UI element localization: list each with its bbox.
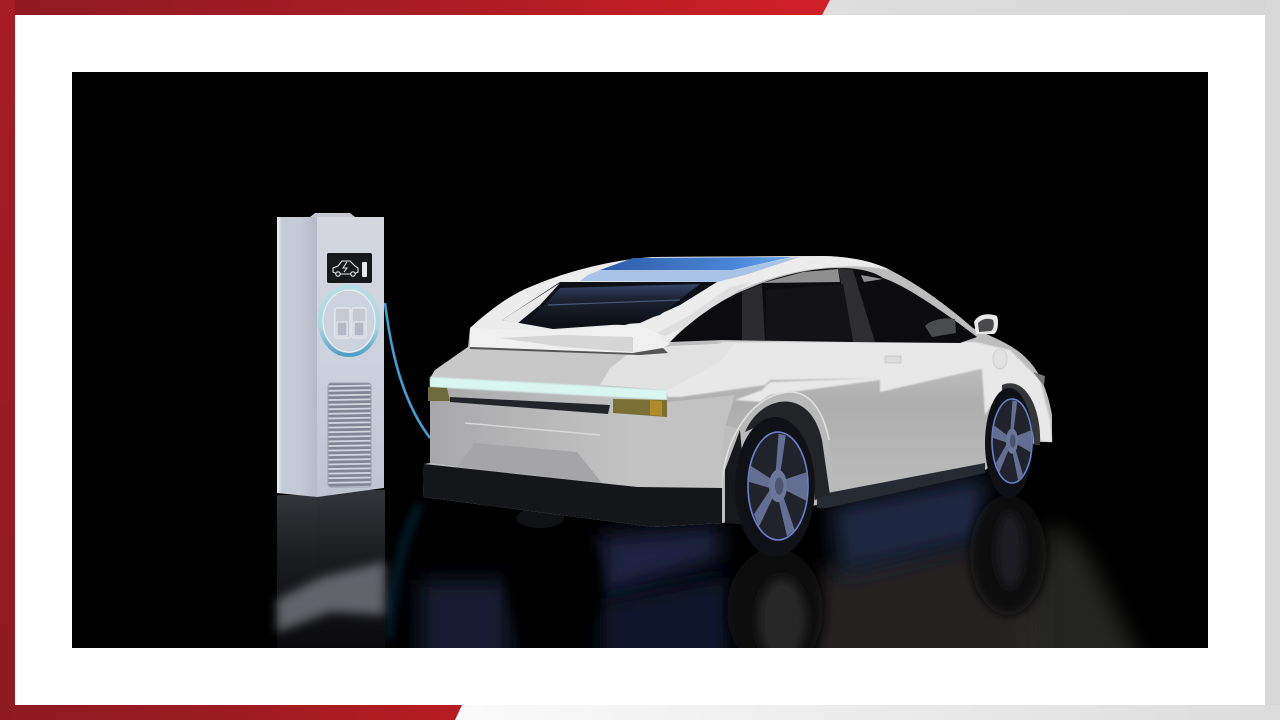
interior tint xyxy=(842,284,853,340)
charging cable xyxy=(385,303,430,438)
top red accent bar xyxy=(0,0,830,15)
bottom red accent bar xyxy=(0,705,462,720)
trunk lid xyxy=(430,347,633,387)
side windows xyxy=(670,268,977,343)
icon: battery xyxy=(362,262,367,277)
charge flap xyxy=(993,349,1007,369)
right grey edge xyxy=(1265,0,1280,720)
rear wheel xyxy=(725,401,830,557)
roof light band xyxy=(580,257,800,282)
B pillar xyxy=(838,268,875,342)
solar roof panel xyxy=(600,257,792,270)
rear light bar xyxy=(430,377,667,400)
rear windshield xyxy=(502,282,717,329)
charging station xyxy=(277,213,384,497)
charging ring xyxy=(320,287,378,355)
roof xyxy=(470,256,890,353)
wing mirror xyxy=(974,314,998,334)
charger top cap xyxy=(310,213,355,217)
side panel xyxy=(666,387,1034,448)
ventilation grille xyxy=(328,383,371,487)
floor reflections xyxy=(385,470,1142,648)
rear face xyxy=(430,386,668,466)
door handle xyxy=(885,356,901,363)
charger reflection xyxy=(277,490,385,648)
left red edge xyxy=(0,0,15,720)
front headlight xyxy=(1033,372,1045,386)
rear bumper xyxy=(423,464,722,527)
rear recess xyxy=(457,443,602,483)
top bar grey section xyxy=(0,0,1280,15)
rear fender arch xyxy=(744,395,822,422)
front wheel xyxy=(985,383,1040,498)
left tail lamp xyxy=(428,387,450,401)
side highlights xyxy=(662,342,1052,442)
display screen xyxy=(327,253,372,283)
charger side face xyxy=(277,217,317,497)
electric car xyxy=(423,256,1052,557)
right tail lamp xyxy=(613,399,667,417)
icon: car with charging bolt xyxy=(333,261,358,276)
rear-left wheel under car xyxy=(516,510,564,528)
dark rear slit xyxy=(450,397,610,414)
bottom bar light section xyxy=(440,705,1280,720)
photo panel xyxy=(72,72,1208,680)
side sill xyxy=(817,463,985,508)
car body silhouette xyxy=(423,256,1052,527)
C pillar xyxy=(742,284,765,340)
window reflection strips xyxy=(762,269,840,283)
rear spoiler xyxy=(470,282,750,355)
trunk crease line xyxy=(465,423,600,435)
door mirror inside glass xyxy=(925,318,956,337)
charger front face xyxy=(317,217,384,497)
charging sockets xyxy=(335,308,366,338)
